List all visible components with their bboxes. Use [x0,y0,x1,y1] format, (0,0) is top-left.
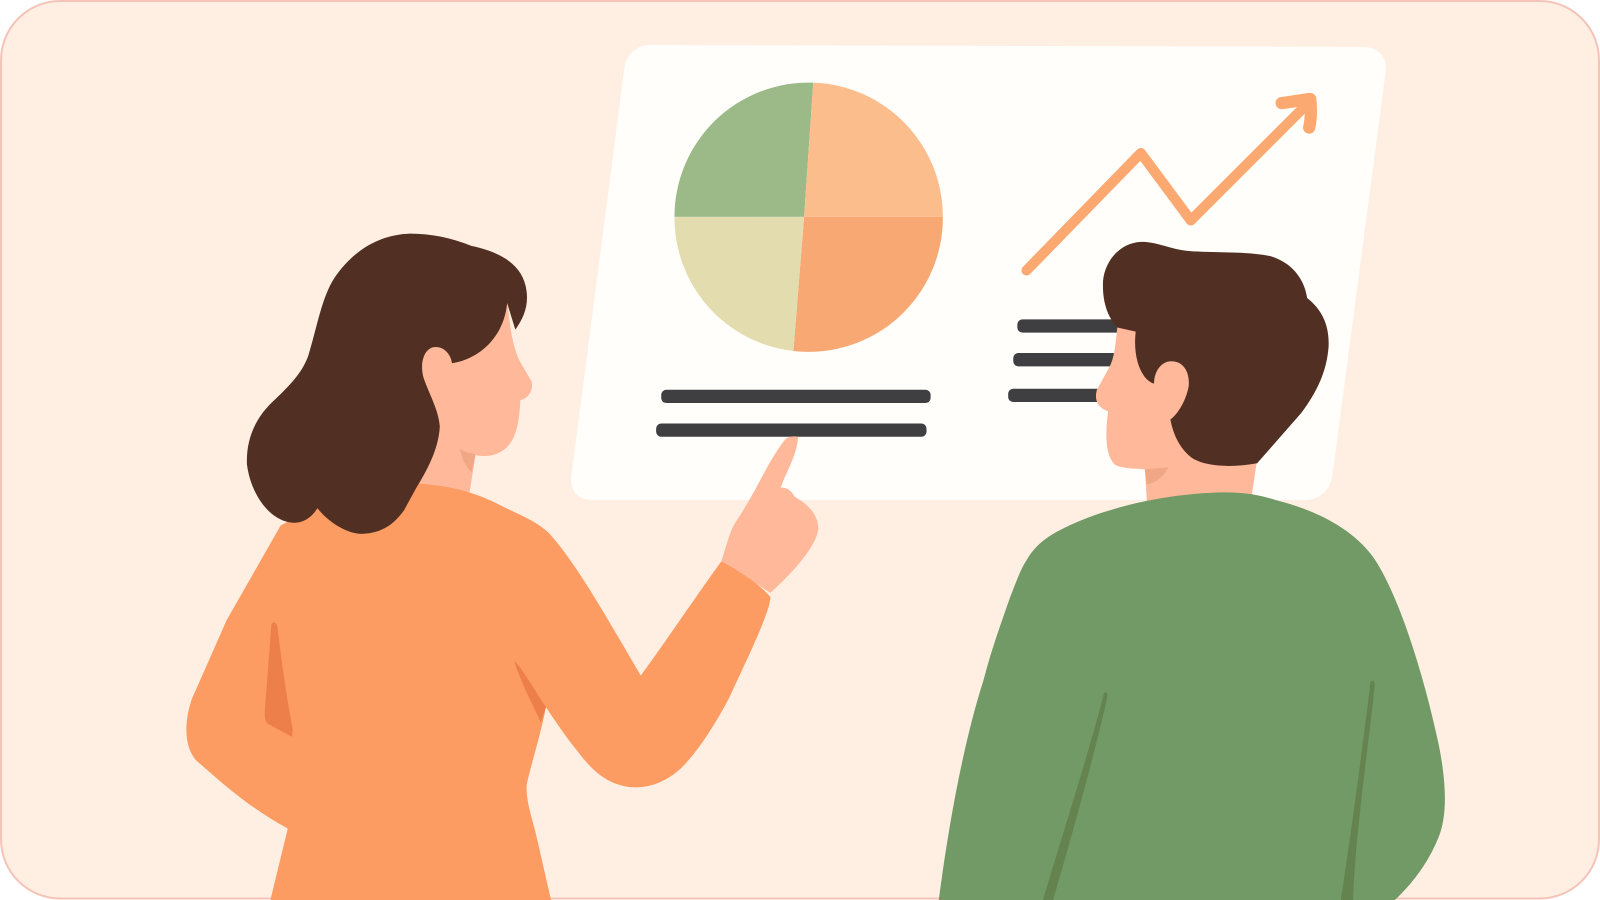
text lines under trend line [1008,319,1124,402]
pie slice: light orange [804,83,943,217]
woman figure [186,234,818,900]
pie slice: green [674,83,813,217]
woman right sleeve fold [514,661,546,722]
pie slice: dark orange [793,217,943,352]
woman hair [247,234,527,534]
text lines under pie [656,390,931,437]
woman left sleeve fold [265,622,293,737]
pie chart [674,83,943,352]
man neck shadow [1145,467,1168,485]
man neck and face [1096,327,1257,502]
board surface [571,45,1386,500]
man green sweater [939,492,1445,900]
man right sweater fold [1341,681,1375,900]
man left sweater fold [1043,692,1107,900]
woman neck and face [403,302,532,500]
woman hand pointing [721,436,818,593]
pie slice: pale yellow [674,217,804,351]
woman neck shadow [460,449,476,472]
man figure [939,242,1445,900]
man hair [1103,242,1329,466]
presentation board [571,45,1386,500]
trend line arrow [1027,99,1311,270]
woman orange top [186,484,770,900]
